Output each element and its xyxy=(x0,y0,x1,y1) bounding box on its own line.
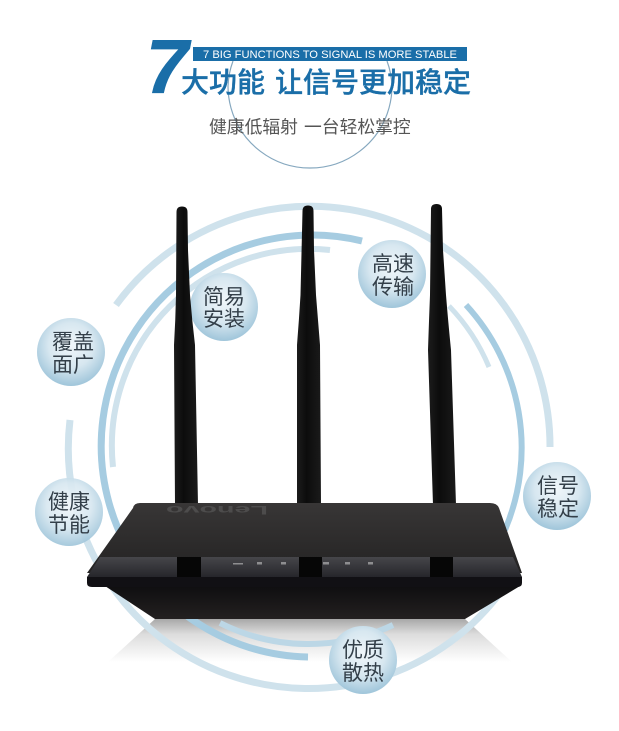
router front lip xyxy=(87,577,522,587)
bubble: stable signal xyxy=(523,462,591,530)
bubble: good heat dissipation: 优质 xyxy=(342,639,384,662)
status LEDs xyxy=(233,562,373,564)
inner ring top-left arc xyxy=(112,249,330,467)
bubble: wide coverage: 覆盖 xyxy=(52,331,94,354)
router glossy strip xyxy=(87,557,522,577)
subtitle xyxy=(209,117,411,137)
bubble: easy install xyxy=(190,273,258,341)
middle ring right arc xyxy=(466,305,522,530)
main title: 让信号更加稳定 xyxy=(275,67,471,98)
subtitle: 健康低辐射 xyxy=(209,117,298,137)
english banner: 7 BIG FUNCTIONS TO SIGNAL IS MORE STABLE xyxy=(203,49,457,61)
bubble: stable signal: 稳定 xyxy=(537,498,579,521)
bubble: energy saving: 健康 xyxy=(48,491,90,514)
bubble: good heat dissipation xyxy=(329,626,397,694)
bubble: energy saving xyxy=(35,478,103,546)
signal rings xyxy=(68,206,550,688)
subtitle: 一台轻松掌控 xyxy=(304,117,411,137)
outer ring top arc xyxy=(116,206,550,447)
router xyxy=(87,503,522,619)
outer ring bottom arc xyxy=(68,420,511,688)
middle ring left arc xyxy=(101,235,362,657)
bubble: wide coverage xyxy=(37,318,105,386)
thin header circle arc xyxy=(228,61,392,168)
reflection under router xyxy=(108,619,512,662)
antenna: left xyxy=(174,206,198,505)
main title: 大功能 xyxy=(181,67,265,98)
bubble: high speed: 传输 xyxy=(372,276,414,299)
router top panel xyxy=(87,503,522,573)
inner ring bottom arc xyxy=(220,623,393,644)
antenna reflections xyxy=(177,557,453,577)
brand logo: Lenovo xyxy=(166,503,268,517)
bubble: easy install: 安装 xyxy=(203,308,245,331)
bubble: high speed: 高速 xyxy=(372,253,414,276)
bubble: good heat dissipation: 散热 xyxy=(342,662,384,685)
main title xyxy=(181,67,471,98)
antenna: right xyxy=(428,204,456,505)
bubble: energy saving: 节能 xyxy=(48,514,90,537)
bubble: wide coverage: 面广 xyxy=(52,354,94,377)
antenna: middle xyxy=(297,206,321,505)
bubble: high speed xyxy=(358,240,426,308)
big numeral 7: 7 xyxy=(146,25,192,110)
router base xyxy=(105,586,520,619)
bubble: easy install: 简易 xyxy=(203,286,245,309)
inner ring right arc xyxy=(449,306,489,367)
bubble: stable signal: 信号 xyxy=(537,475,579,498)
